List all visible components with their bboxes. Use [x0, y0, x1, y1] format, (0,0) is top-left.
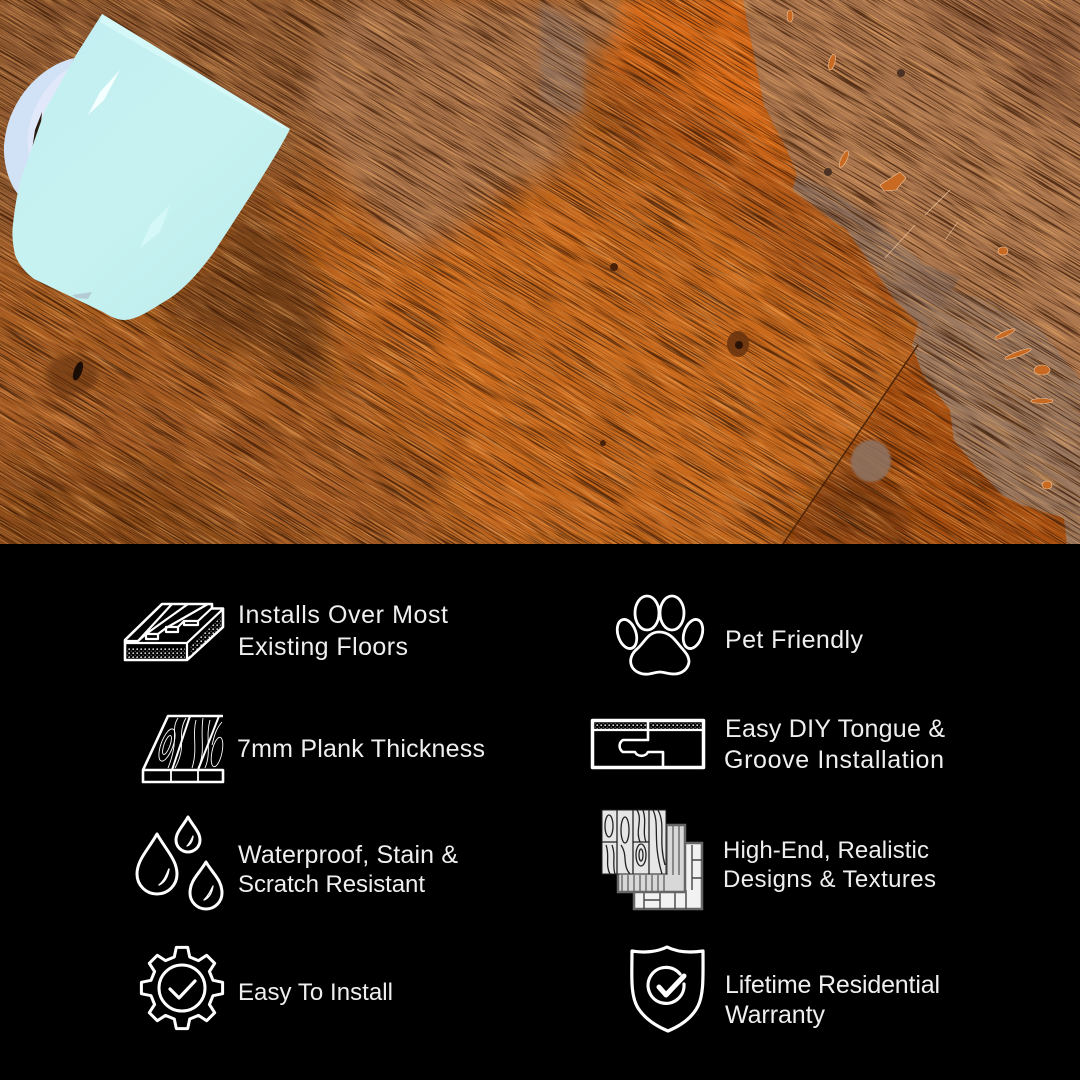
label: Groove Installation [724, 746, 944, 774]
label: Easy To Install [238, 979, 393, 1006]
sample 2 [618, 825, 685, 892]
icon: plank with wood grain [143, 716, 225, 782]
sample 1 [602, 810, 666, 874]
plank seam [783, 345, 918, 544]
icon: gear with check [141, 947, 223, 1029]
label: Designs & Textures [723, 866, 936, 893]
tan wash upper middle [300, 0, 620, 250]
feature: installs over most existing floors [125, 601, 448, 661]
dark wet band [600, 51, 894, 312]
feature: pet friendly [614, 596, 864, 674]
label: High-End, Realistic [723, 837, 929, 864]
water droplets [787, 10, 1053, 489]
mug scuff [72, 292, 92, 299]
grey wet patch right [912, 290, 1080, 544]
darker corner top right [914, 0, 1080, 133]
icon: stacked texture samples [602, 810, 702, 909]
feature: easy to install [141, 947, 393, 1029]
label: Scratch Resistant [238, 871, 425, 898]
feature: lifetime warranty [632, 947, 940, 1031]
photo: wood floor with spilled water and mug [0, 0, 1080, 590]
sample 3 [634, 843, 702, 909]
wood grain light [0, 0, 1080, 544]
grey wet strip [793, 175, 960, 330]
label: Pet Friendly [725, 626, 864, 654]
wood base tone [0, 0, 1080, 544]
icon: shield with check [632, 947, 703, 1031]
feature: designs and textures [602, 810, 936, 909]
icon: tongue and groove joint [592, 719, 704, 768]
icon: water drops [137, 817, 222, 909]
icon: paw print [614, 596, 706, 674]
label: Existing Floors [238, 633, 408, 661]
label: Warranty [725, 1001, 826, 1029]
label: 7mm Plank Thickness [237, 735, 485, 763]
mug body [12, 14, 290, 320]
round wet spot [851, 440, 891, 482]
feature: waterproof [137, 817, 458, 909]
feature: plank thickness [143, 716, 485, 782]
label: Easy DIY Tongue & [725, 715, 945, 743]
label: Lifetime Residential [725, 971, 940, 999]
label: Waterproof, Stain & [238, 841, 458, 869]
mug gloss [88, 70, 120, 115]
mug handle [4, 58, 74, 194]
grey patch upper middle [540, 0, 585, 115]
feature: tongue and groove [592, 715, 945, 774]
label: Installs Over Most [238, 601, 448, 629]
dry tan floor right [743, 0, 1080, 544]
mug rim highlight [100, 14, 290, 129]
lower right dark plank [783, 345, 1067, 544]
orange wet strip [600, 0, 798, 190]
wood grain dark [0, 0, 1080, 544]
soft wood tone variation [0, 0, 930, 590]
icon: layered floor section [125, 604, 223, 660]
mug shadow [150, 190, 330, 385]
knots [46, 69, 905, 446]
